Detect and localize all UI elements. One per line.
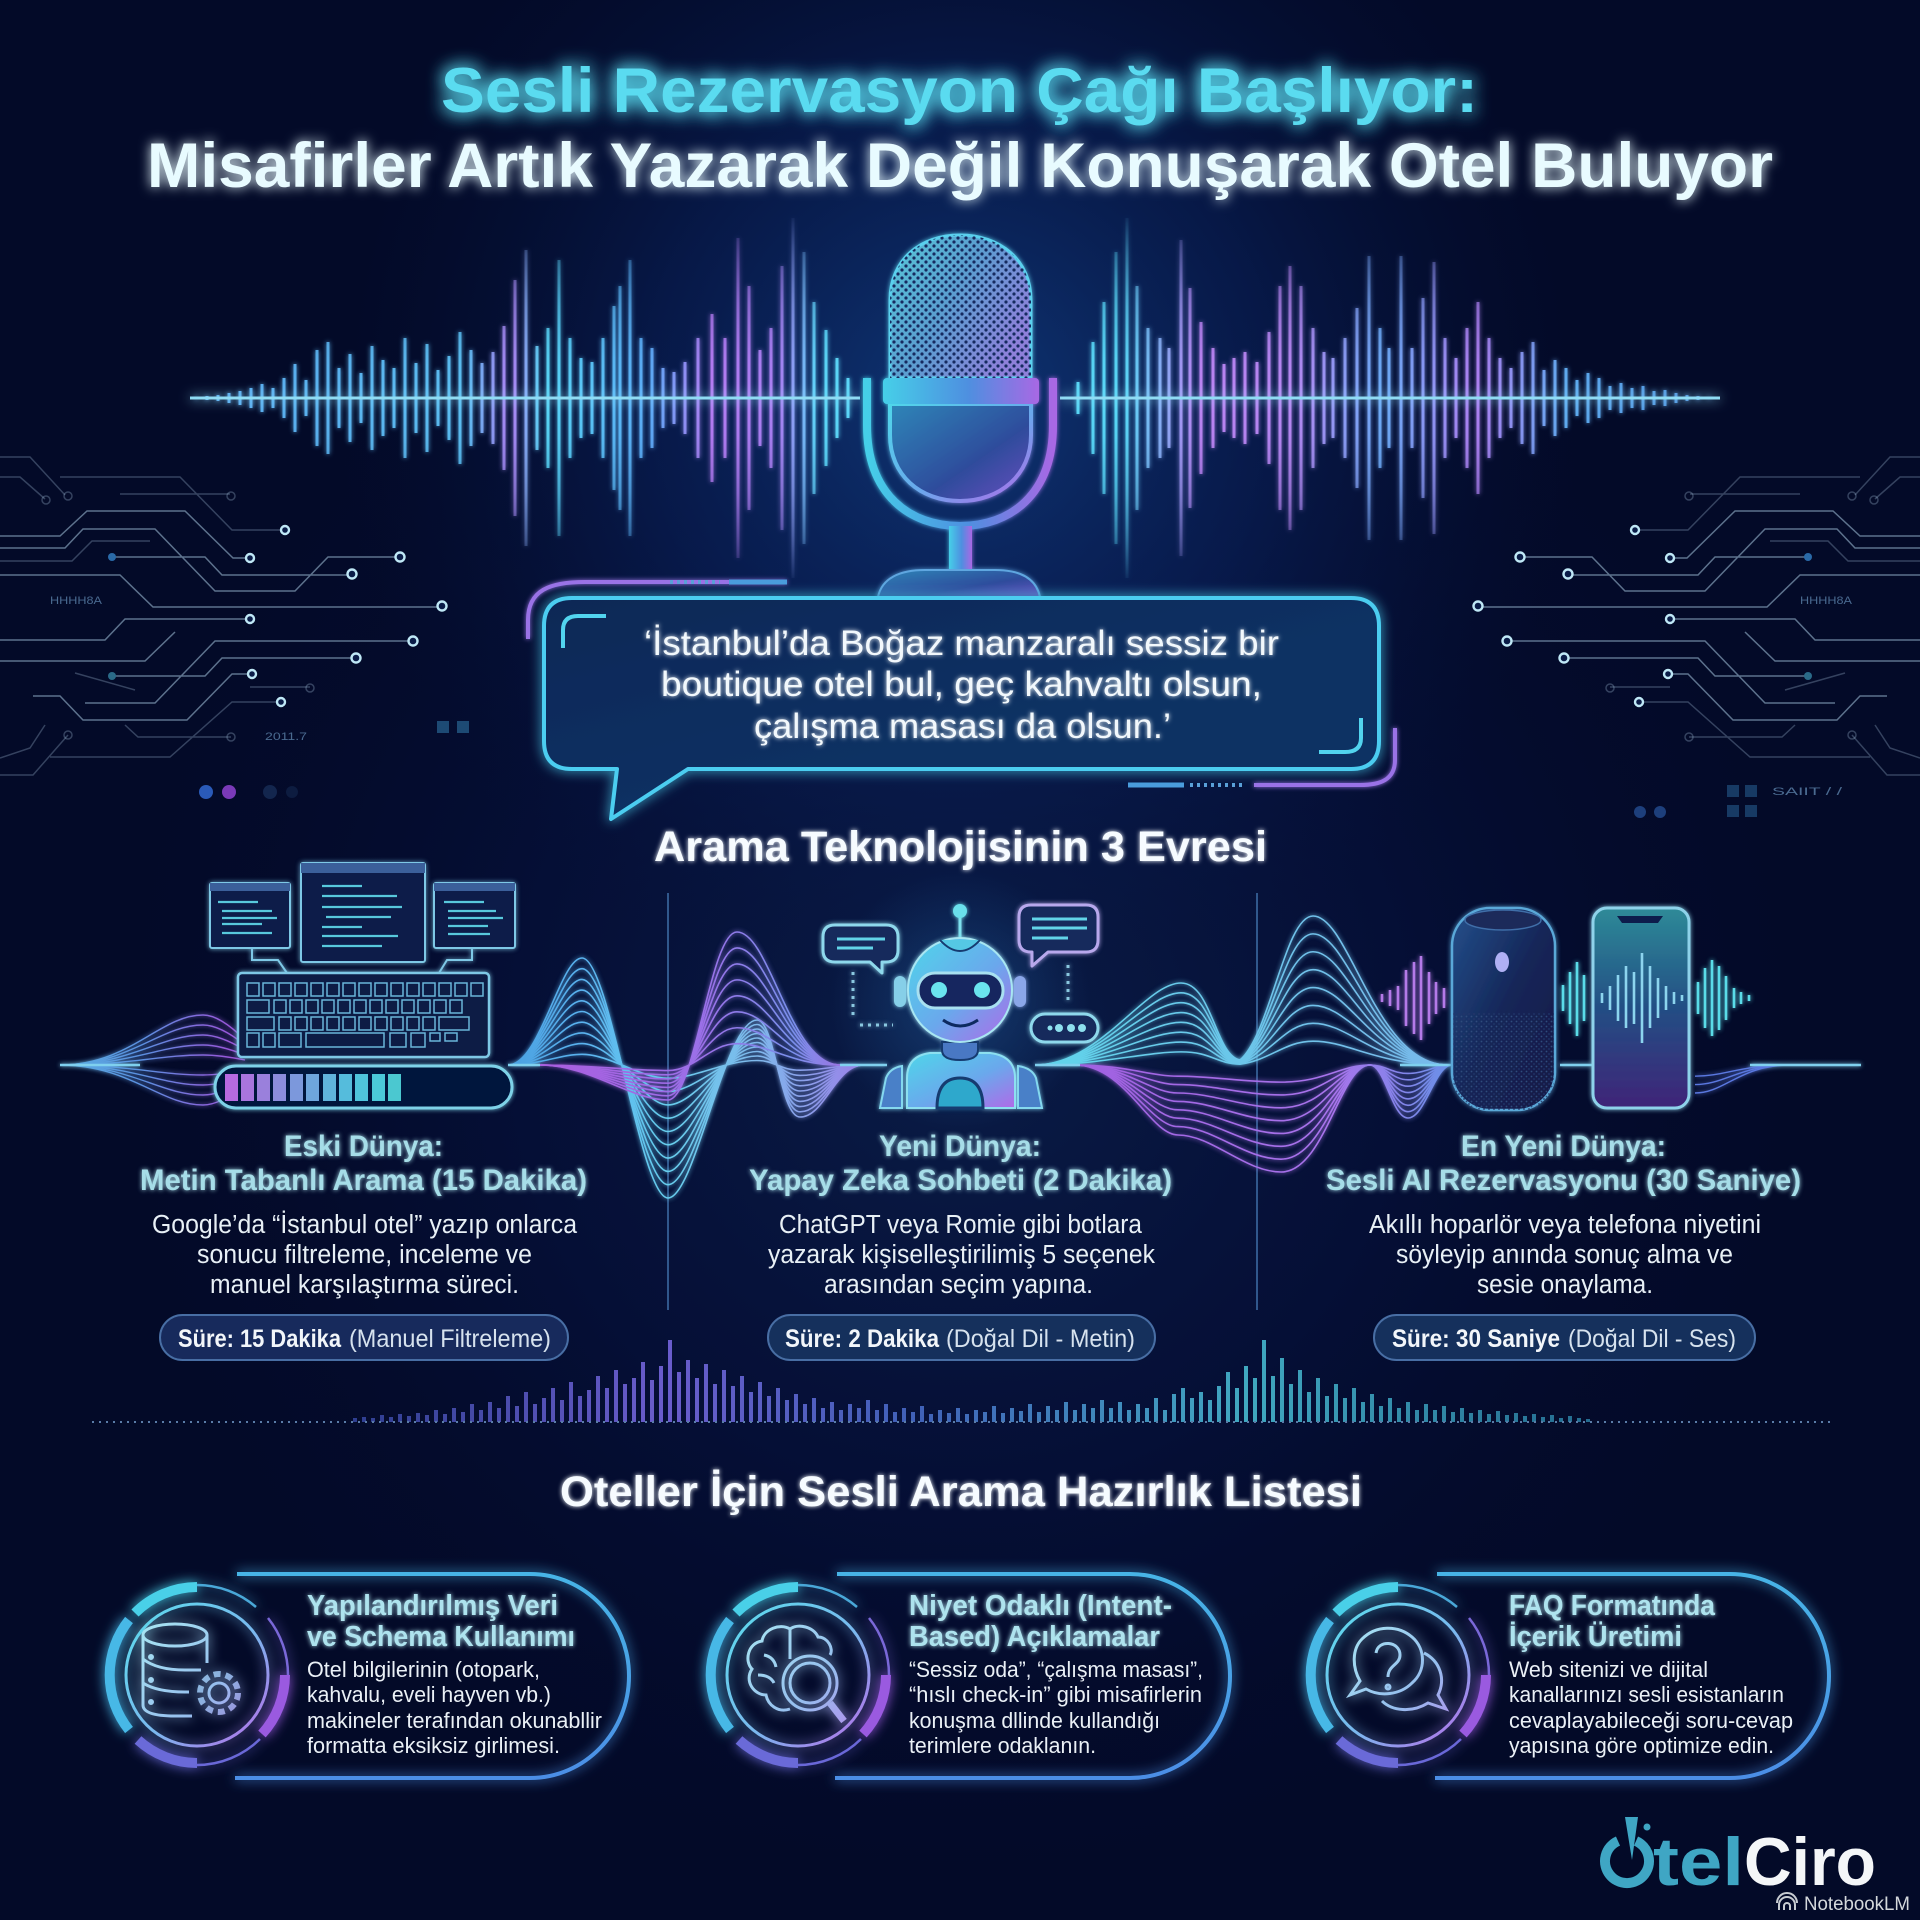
card text: İçerik Üretimi <box>1509 1621 1682 1653</box>
duration pill: (Doğal Dil - Metin) <box>946 1325 1135 1353</box>
column 1: Eski Dünya <box>140 1130 587 1360</box>
panel: structured data <box>110 1574 629 1778</box>
logo: OtelCiro: Ciro <box>1744 1824 1876 1900</box>
heading: Eski Dünya: <box>284 1130 443 1163</box>
card text: Niyet Odaklı (Intent- <box>909 1590 1172 1622</box>
description <box>768 1211 1155 1299</box>
heading: Metin Tabanlı Arama (15 Dakika) <box>140 1164 587 1197</box>
heading: Oteller İçin Sesli Arama Hazırlık Listesi: Oteller İçin Sesli Arama Hazırlık Listesi <box>560 1468 1362 1516</box>
card description: Otel bilgilerinin (otopark, <box>307 1657 540 1682</box>
description: söyleyip anında sonuç alma ve <box>1396 1241 1733 1269</box>
icon: brain and magnifier <box>711 1585 889 1765</box>
card text: ve Schema Kullanımı <box>307 1621 575 1653</box>
duration pill: Süre: 2 Dakika <box>785 1325 940 1353</box>
panel: intent based descriptions <box>711 1574 1230 1778</box>
card description: yapısına göre optimize edin. <box>1509 1733 1774 1758</box>
quote text <box>644 624 1279 746</box>
card description: kanallarınızı sesli esistanların <box>1509 1682 1784 1707</box>
heading <box>140 1130 587 1197</box>
card text: Based) Açıklamalar <box>909 1621 1160 1653</box>
heading <box>749 1130 1172 1197</box>
audio spectrum bars <box>92 1340 1830 1422</box>
duration pill: (Manuel Filtreleme) <box>349 1325 551 1353</box>
duration pill <box>1374 1315 1755 1360</box>
card description <box>909 1657 1203 1758</box>
card description: kahvalu, eveli hayven vb.) <box>307 1682 551 1707</box>
card description: terimlere odaklanın. <box>909 1733 1096 1758</box>
card text: FAQ Formatında <box>1509 1590 1716 1622</box>
flowing sound waves <box>60 916 1861 1198</box>
icon: question chat bubbles <box>1311 1585 1489 1765</box>
main sound waveform <box>190 218 1720 578</box>
heading <box>1326 1130 1801 1197</box>
card text <box>307 1590 575 1653</box>
progress bar <box>215 1066 512 1108</box>
card description: “hıslı check-in” gibi misafirlerin <box>909 1682 1202 1707</box>
card text <box>909 1590 1172 1653</box>
description: Google’da “İstanbul otel” yazıp onlarca <box>152 1210 578 1239</box>
card description: Web sitenizi ve dijital <box>1509 1657 1708 1682</box>
chat bubbles <box>823 905 1098 1042</box>
duration pill: Süre: 15 Dakika <box>178 1325 342 1353</box>
heading: Sesli AI Rezervasyonu (30 Saniye) <box>1326 1164 1801 1197</box>
phone <box>1593 908 1689 1108</box>
description <box>1369 1211 1761 1299</box>
duration pill <box>160 1315 568 1360</box>
icon: smart speaker and phone <box>1382 908 1749 1110</box>
description: sesie onaylama. <box>1477 1271 1653 1299</box>
card description: “Sessiz oda”, “çalışma masası”, <box>909 1657 1203 1682</box>
title: Misafirler Artık Yazarak Değil Konuşarak Otel Buluyor <box>147 131 1773 201</box>
heading: En Yeni Dünya: <box>1461 1130 1666 1163</box>
quote text: ‘İstanbul’da Boğaz manzaralı sessiz bir <box>644 624 1279 663</box>
card description: konuşma dllinde kullandığı <box>909 1708 1160 1733</box>
description: arasından seçim yapına. <box>824 1271 1093 1299</box>
quote text: boutique otel bul, geç kahvaltı olsun, <box>661 665 1262 704</box>
card description: cevaplayabileceği soru-cevap <box>1509 1708 1793 1733</box>
circuit pattern right: HHHH8A <box>1800 595 1853 607</box>
circuit pattern left <box>0 457 469 799</box>
duration pill: Süre: 30 Saniye <box>1392 1325 1560 1353</box>
keyboard <box>238 973 489 1057</box>
circuit pattern left: 2011.7 <box>265 731 307 743</box>
heading: Arama Teknolojisinin 3 Evresi: Arama Teknolojisinin 3 Evresi <box>654 823 1267 871</box>
title <box>147 56 1773 201</box>
column 3: En Yeni Dünya <box>1326 1130 1801 1360</box>
circuit pattern right <box>1474 457 1920 818</box>
icon: database and gear <box>110 1585 288 1765</box>
card description <box>307 1657 602 1758</box>
description: Akıllı hoparlör veya telefona niyetini <box>1369 1211 1761 1239</box>
title: Sesli Rezervasyon Çağı Başlıyor: <box>441 56 1478 126</box>
icon: AI robot with chat bubbles <box>823 904 1098 1108</box>
description: sonucu filtreleme, inceleme ve <box>197 1241 532 1269</box>
speaker <box>1452 908 1555 1110</box>
quote bubble <box>528 582 1395 819</box>
card description: makineler terafından okunabllir <box>307 1708 602 1733</box>
duration pill: (Doğal Dil - Ses) <box>1568 1325 1736 1353</box>
robot body <box>880 1066 1042 1108</box>
column 2: Yeni Dünya <box>749 1130 1172 1360</box>
card text <box>1509 1590 1716 1653</box>
quote text: çalışma masası da olsun.’ <box>754 707 1171 746</box>
circuit pattern left: HHHH8A <box>50 595 103 607</box>
icon: microphone <box>867 235 1053 597</box>
search windows <box>210 863 515 973</box>
description: manuel karşılaştırma süreci. <box>210 1271 519 1299</box>
circuit pattern right: SAIIT / / <box>1772 786 1844 798</box>
description: yazarak kişiselleştirilimiş 5 seçenek <box>768 1241 1155 1269</box>
logo: OtelCiro <box>1605 1817 1876 1900</box>
heading: Yeni Dünya: <box>879 1130 1041 1163</box>
NotebookLM mark: NotebookLM <box>1804 1894 1910 1915</box>
heading: Yapay Zeka Sohbeti (2 Dakika) <box>749 1164 1172 1197</box>
icon: text search windows and keyboard <box>210 863 515 1108</box>
column dividers <box>668 893 1257 1310</box>
panel: FAQ content <box>1311 1574 1829 1778</box>
card description <box>1509 1657 1793 1758</box>
description: ChatGPT veya Romie gibi botlara <box>779 1211 1143 1239</box>
logo: OtelCiro: tel <box>1653 1824 1744 1900</box>
card text: Yapılandırılmış Veri <box>307 1590 558 1622</box>
sound bars around devices <box>1382 956 1444 1040</box>
duration pill <box>768 1315 1155 1360</box>
card description: formatta eksiksiz girlimesi. <box>307 1733 560 1758</box>
description <box>152 1210 578 1299</box>
